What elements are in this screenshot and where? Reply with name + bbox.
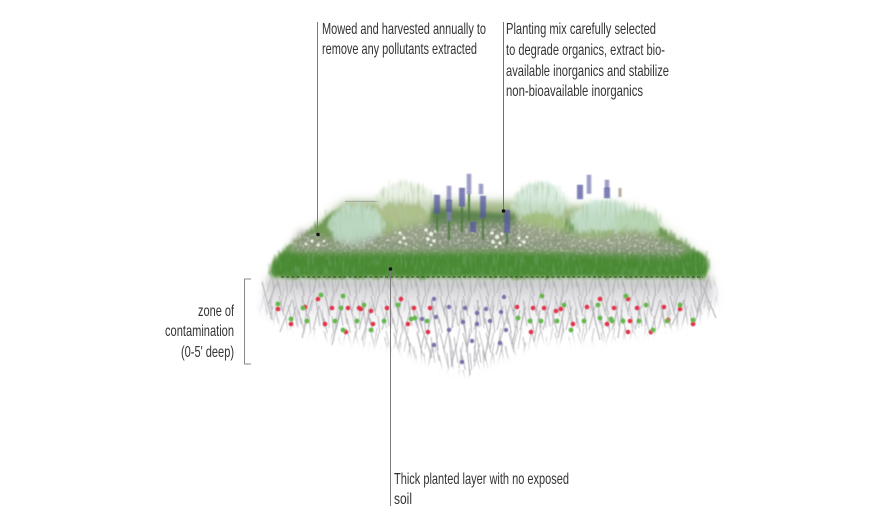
- label: zone of contamination: zone of: [198, 303, 234, 320]
- label: zone of contamination: contamination: [165, 323, 234, 340]
- lupine spikes: [437, 174, 620, 245]
- meadow planting block: [262, 174, 714, 279]
- label: mowed and harvested: remove any pollutants extracted: [322, 41, 477, 58]
- label: planting mix: available inorganics and stabilize: [506, 63, 669, 80]
- label: mowed and harvested: Mowed and harvested annually to: [322, 21, 486, 38]
- label: planting mix: Planting mix carefully selected: [506, 21, 656, 38]
- leader: thick planted layer: [389, 267, 392, 506]
- roots illustration: [250, 275, 730, 380]
- label: planting mix: to degrade organics, extract bio-: [506, 42, 665, 59]
- foreground green band: [270, 252, 708, 277]
- label: planting mix: non-bioavailable inorganics: [506, 83, 643, 100]
- meadow back surface: [290, 202, 690, 250]
- label: zone of contamination: (0-5' deep): [181, 344, 234, 361]
- white flowers: [305, 228, 528, 248]
- dashed front edge: [281, 276, 703, 278]
- soft halo: [272, 204, 706, 274]
- grass blade streaks: [328, 180, 662, 242]
- grass clumps: [329, 182, 662, 248]
- label: thick planted layer: soil: [394, 491, 412, 508]
- label: thick planted layer: Thick planted layer with no exposed: [394, 471, 569, 488]
- contaminant particles: [276, 293, 695, 364]
- red particles: [276, 297, 695, 334]
- leader: mowed and harvested: [316, 22, 320, 236]
- leader: planting mix: [502, 22, 505, 213]
- bracket: zone of contamination: [244, 279, 251, 364]
- flower drifts: [288, 218, 690, 261]
- green particles: [276, 293, 695, 332]
- centre foliage: [425, 208, 520, 250]
- planted ground: [270, 210, 708, 276]
- purple particles: [420, 295, 508, 364]
